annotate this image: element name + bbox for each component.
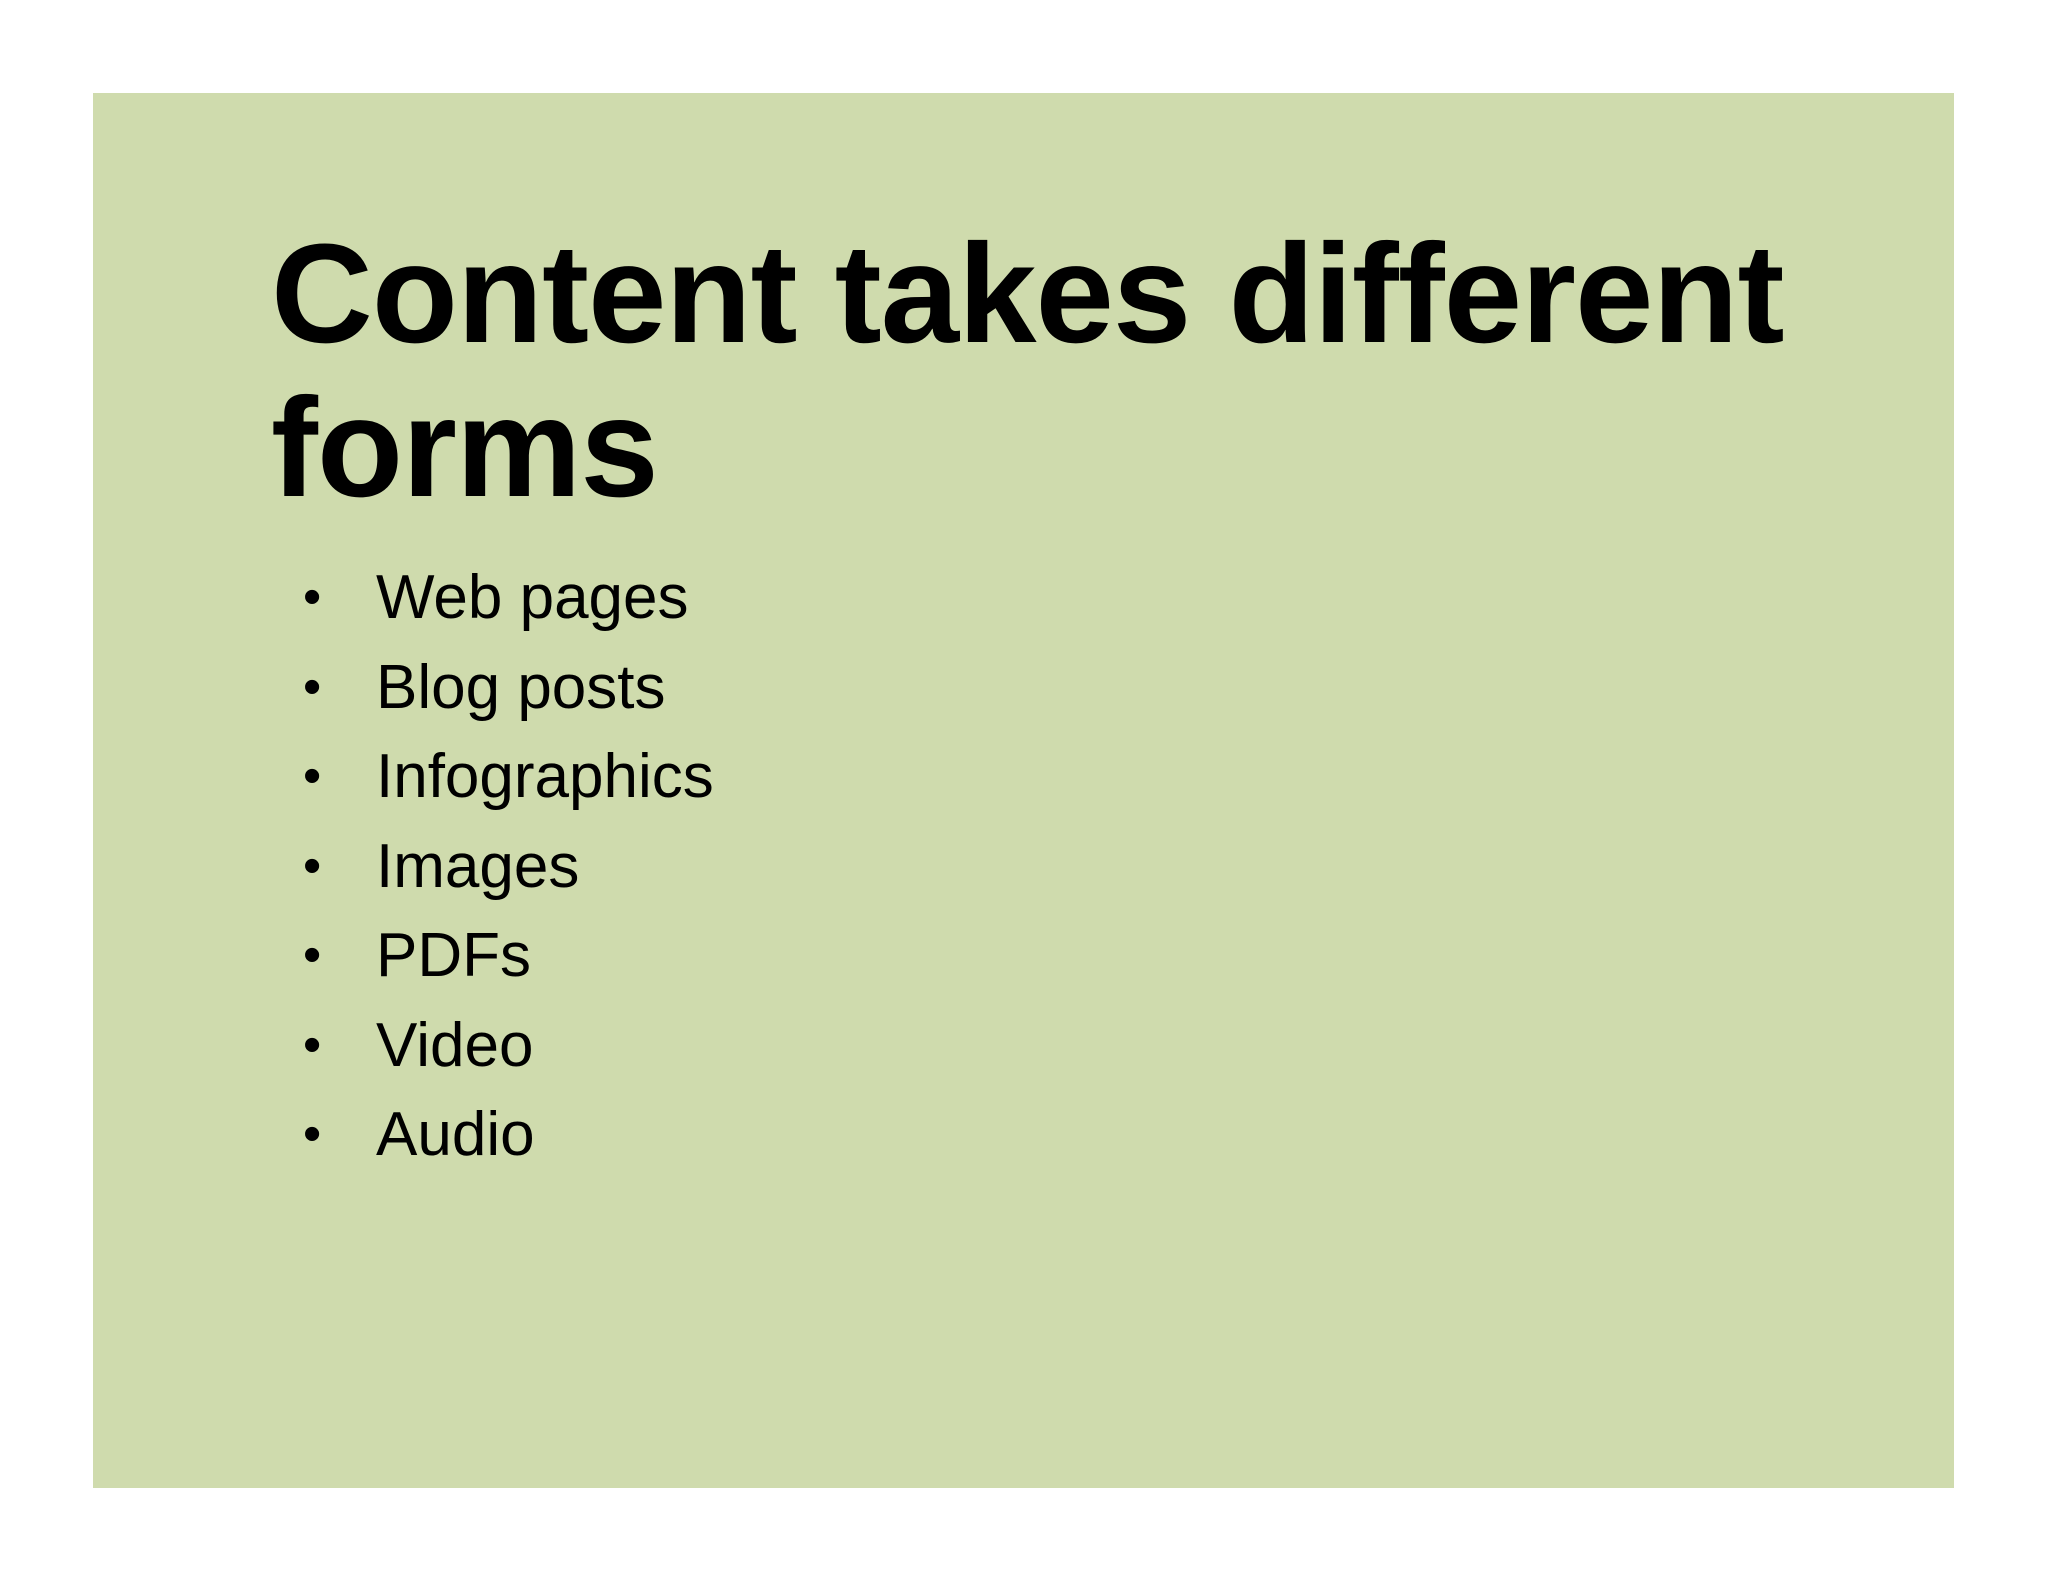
- bullet: PDFs: •: [303, 926, 321, 984]
- bullet: infographics: •: [303, 747, 321, 805]
- title: Content takes different: [271, 214, 1784, 372]
- bullet: video: •: [303, 1016, 321, 1074]
- bullet: web pages: •: [303, 568, 321, 626]
- bullet: images: •: [303, 836, 321, 894]
- bullet: infographics: Infographics: [376, 742, 714, 811]
- bullet: images: Images: [376, 832, 579, 900]
- bullet: video: [303, 1010, 533, 1080]
- bullet list: content forms: [303, 563, 714, 1169]
- bullet: web pages: Web pages: [376, 563, 689, 632]
- bullet: audio: Audio: [376, 1100, 535, 1169]
- bullet: blog posts: Blog posts: [376, 652, 666, 722]
- bullet: audio: •: [303, 1105, 321, 1163]
- bullet: blog posts: •: [303, 658, 321, 716]
- bullet: PDFs: PDFs: [376, 921, 531, 990]
- bullet: video: Video: [376, 1010, 533, 1080]
- bullet: audio: [303, 1100, 535, 1169]
- title: [271, 214, 1784, 526]
- title: forms: [271, 368, 658, 526]
- bullet: PDFs: [303, 921, 531, 990]
